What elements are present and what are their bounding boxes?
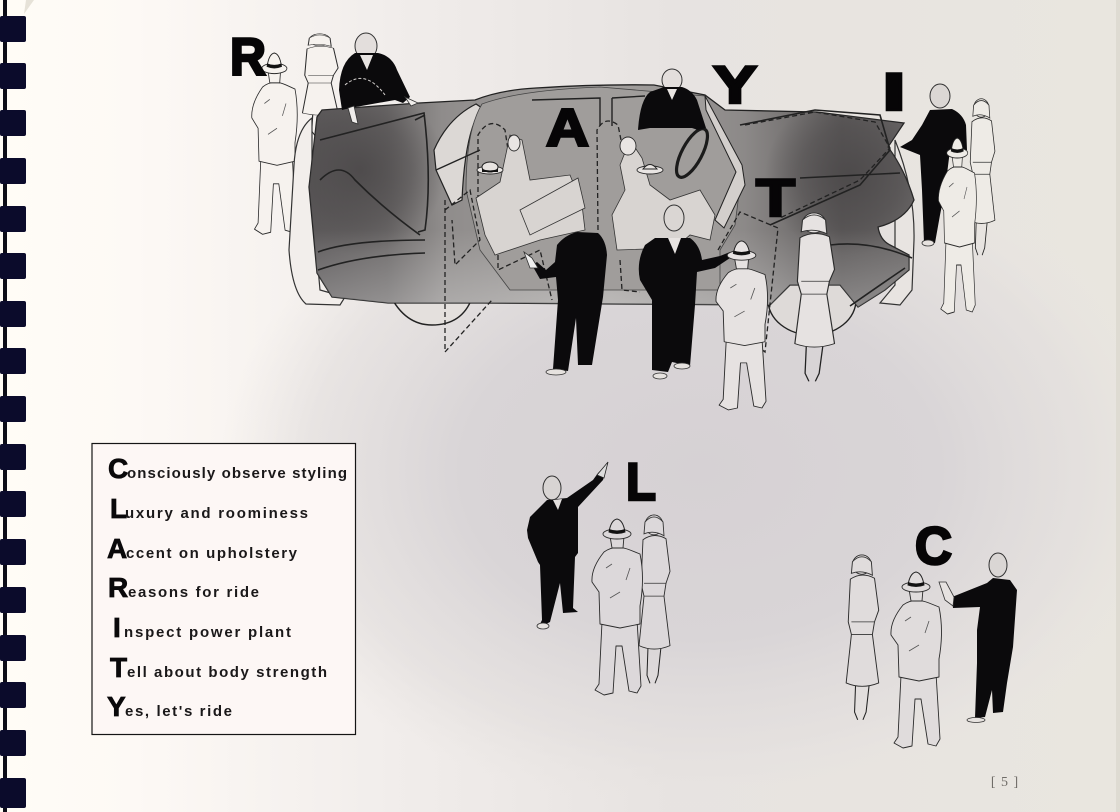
interior [466,87,742,290]
line T: T [110,652,127,683]
letter Y: Y [713,56,757,115]
line R: easons for ride [128,584,259,601]
L group: couple from behind [592,515,670,695]
line Y: Y [107,691,126,722]
front couple: hat man and woman [716,213,835,410]
line L: L [110,493,127,524]
figures behind car: top left couple [252,34,338,234]
rear seat with passengers [476,135,585,255]
line Y [107,691,232,722]
letter A: A [546,99,589,158]
seat dashed outlines [478,121,622,230]
front wheel [390,295,472,325]
line L [110,493,308,524]
line L: uxury and roominess [125,505,308,522]
line A [107,533,298,564]
line R [108,572,259,603]
line C [108,453,347,484]
front bumper outline [289,118,345,305]
line T [110,652,327,683]
window frames [436,96,645,170]
line C: C [108,453,128,484]
line I: I [113,612,121,643]
line R: R [108,572,128,603]
steering wheel [670,124,714,182]
L group: pointing man [527,462,608,629]
line Y: es, let's ride [125,703,232,720]
front man gesturing [639,205,733,379]
line I [113,612,291,643]
line A: A [107,533,127,564]
letter T: T [756,169,795,228]
letter R: R [230,28,266,87]
line T: ell about body strength [127,664,327,681]
C group: gesturing man [939,553,1017,722]
rear bumper outline [880,140,914,305]
spiral binding [0,0,26,812]
open rear door dashed [445,190,492,352]
fender contours [318,113,428,270]
page number: [ 5 ] [991,775,1019,790]
line C: onsciously observe styling [127,465,347,482]
C group: woman and hat man from behind [846,555,942,748]
front man with back turned [524,232,607,375]
line A: ccent on upholstery [126,545,298,562]
man: top left leaning on hood [339,33,418,124]
letter L: L [626,453,656,512]
front seat with passengers [612,137,715,250]
letter C: C [915,517,952,576]
legend panel: CLARITY [92,444,356,734]
open door [705,96,745,228]
rear wheel [768,265,856,335]
car illustration [275,80,935,352]
line I: nspect power plant [124,624,291,641]
right group: man, hat man, woman [900,84,995,314]
man: top centre behind car [638,69,706,130]
windshield [434,104,482,205]
car body [309,85,914,307]
letter I: I [882,63,906,122]
